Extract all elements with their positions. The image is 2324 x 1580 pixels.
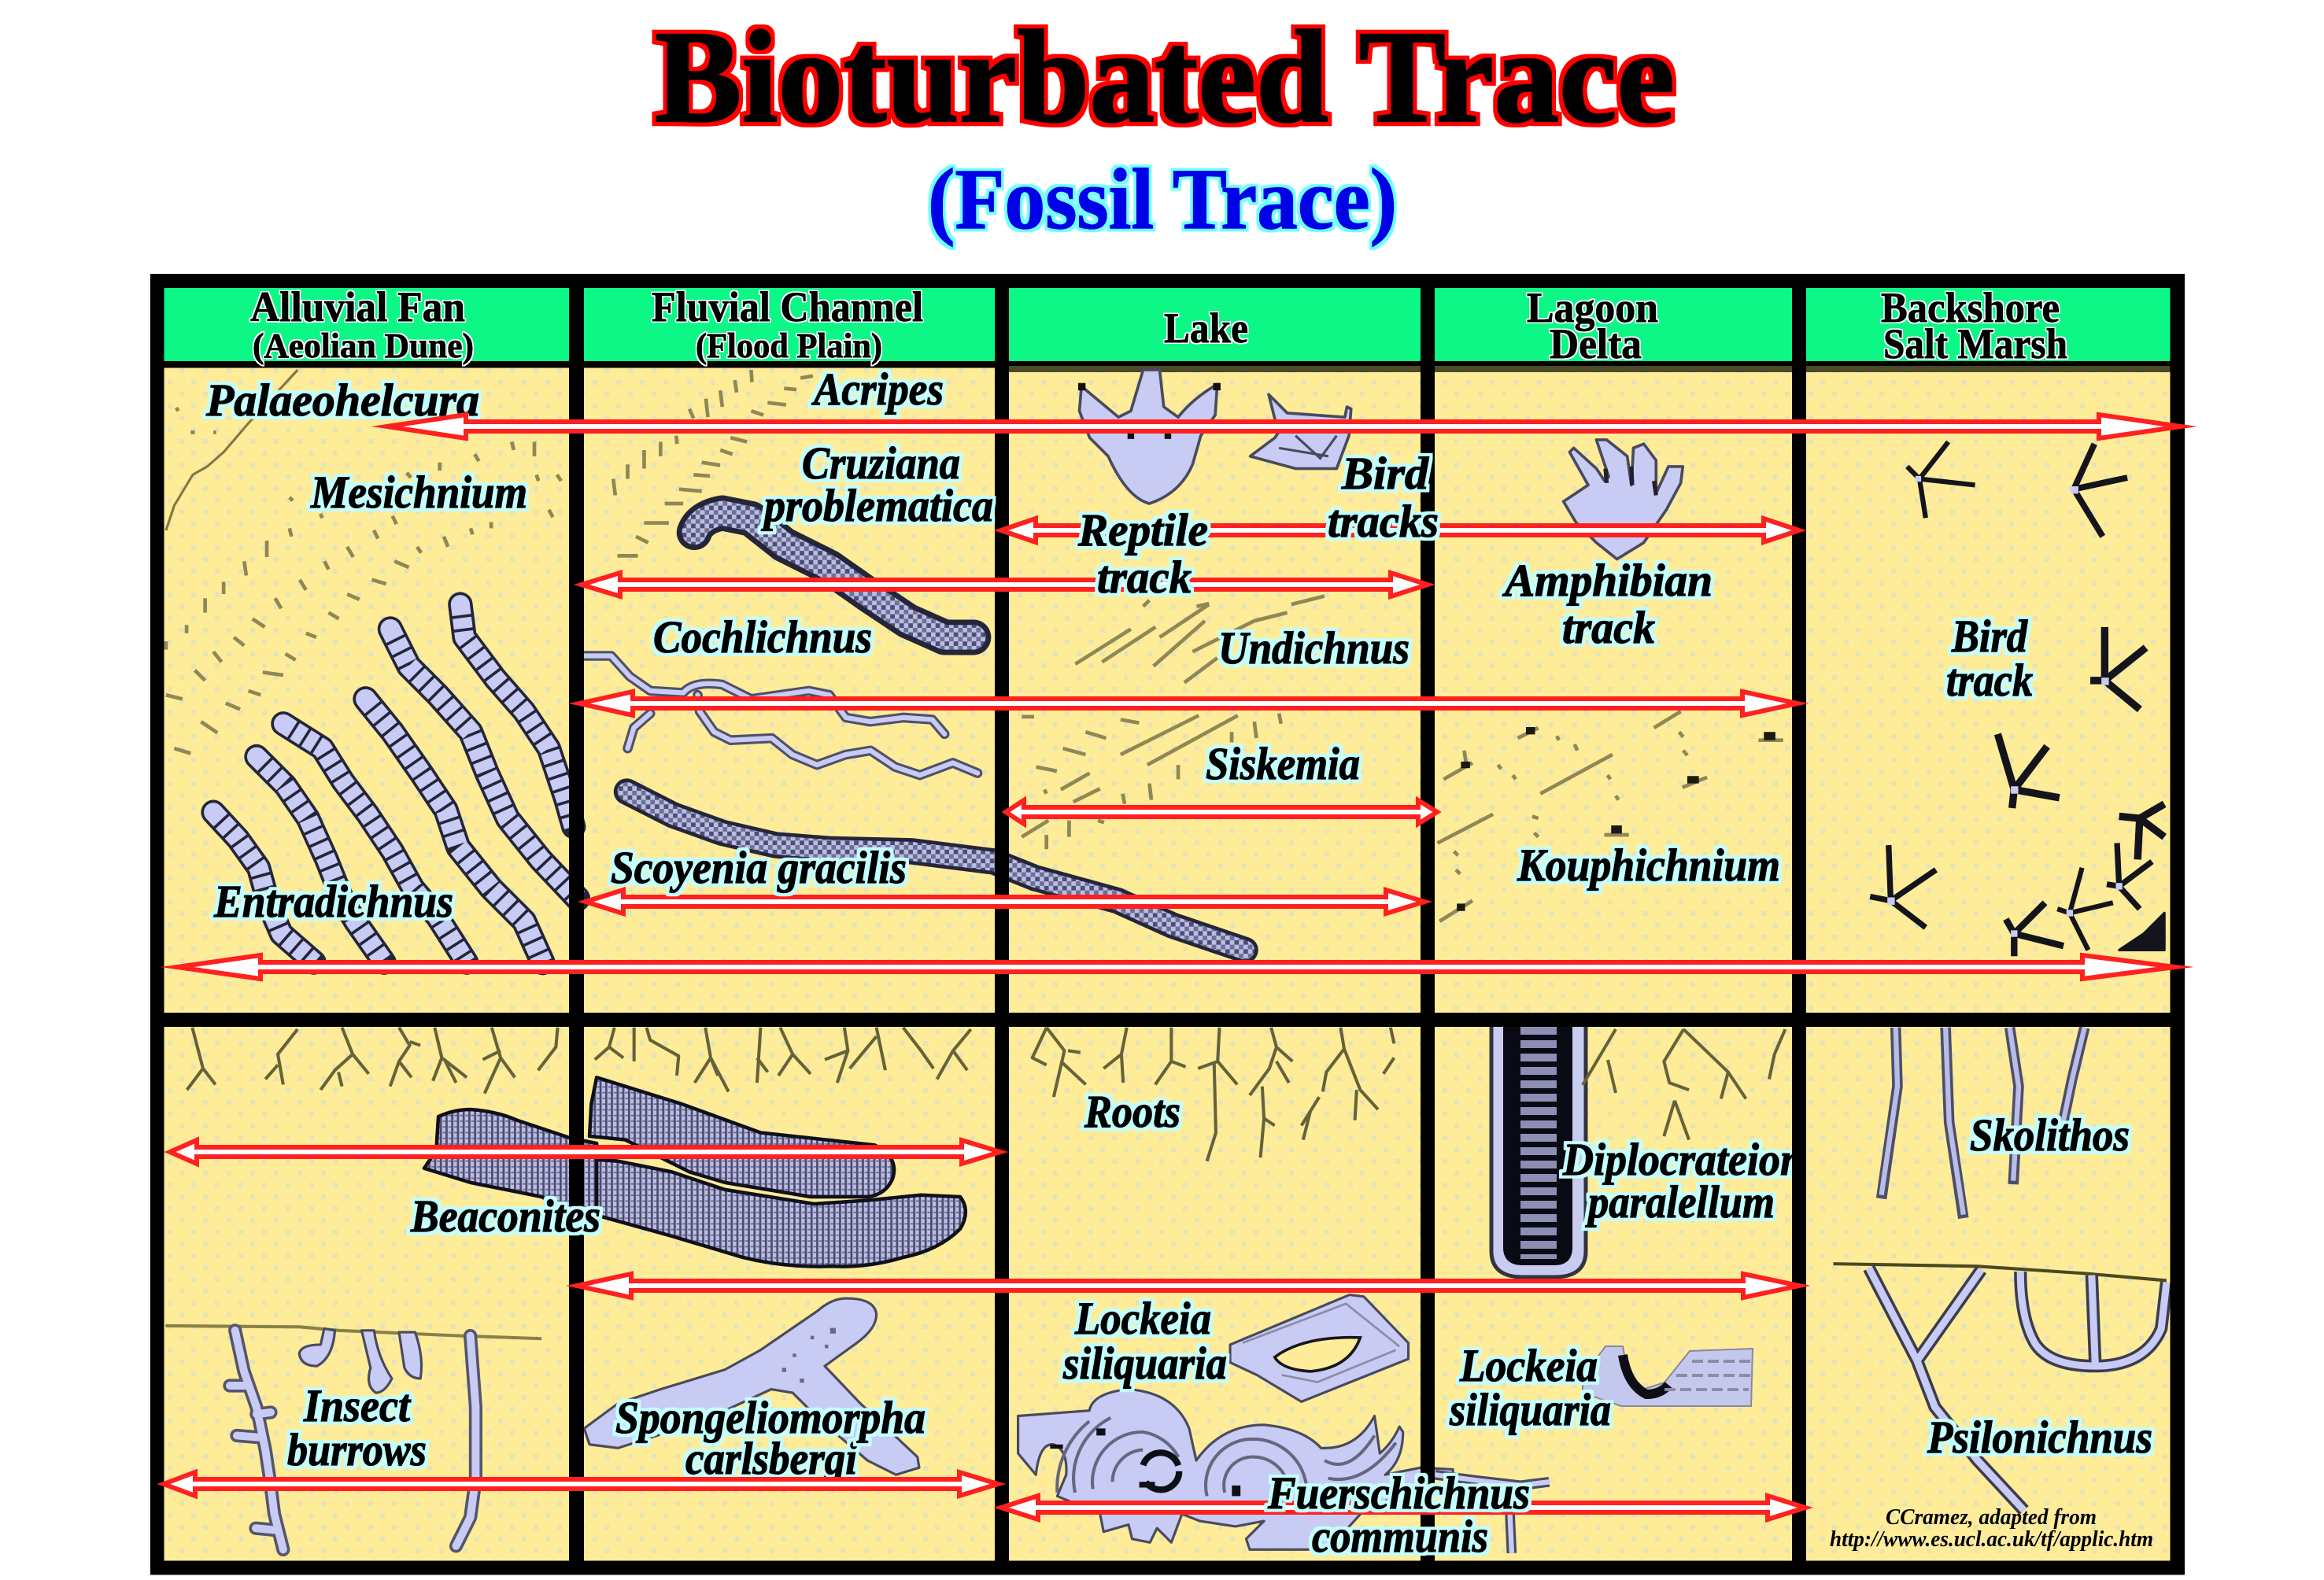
column headers [250, 283, 2067, 367]
icon: footprint centres [1887, 476, 2123, 937]
trace: Acripes marks [613, 370, 813, 556]
trace: burrow drops [299, 1329, 421, 1393]
label: siliquaria, lagoon: siliquaria [1449, 1384, 1611, 1435]
table grid [150, 274, 2185, 1575]
credit: author: CCramez, adapted from [1886, 1505, 2097, 1530]
panel: lagoon delta, lower [1491, 1023, 1785, 1406]
header: Backshore: Backshore [1881, 284, 2060, 331]
label: tracks: tracks [1328, 496, 1439, 547]
header underline strip [1009, 366, 2174, 372]
trace: Fuerschichnus communis [1018, 1390, 1453, 1549]
trace: burrow surface line [165, 1326, 541, 1338]
trace: Fuerschichnus tail [1435, 1475, 1549, 1553]
icon: amphibian finger lines [1605, 467, 1656, 496]
trace: roots [187, 1028, 558, 1094]
panel: backshore salt marsh, upper [1870, 442, 2164, 956]
trace: Lockeia shell hole [1275, 1338, 1360, 1371]
label: Cochlichnus: Cochlichnus [653, 611, 872, 663]
panel: lake, lower [1018, 1028, 1549, 1553]
arrow: Alluvial Fan to Fluvial Channel, burrows [164, 1472, 998, 1496]
trace: roots [1033, 1028, 1394, 1161]
trace: roots [1583, 1029, 1616, 1093]
header: Salt Marsh: Salt Marsh [1883, 320, 2067, 367]
credit: source url: http://www.es.ucl.ac.uk/tf/applic.htm [1830, 1527, 2153, 1552]
panel: alluvial fan, upper [166, 370, 578, 962]
arrow: Fluvial Channel to Lagoon, Cochlichnus [579, 692, 1797, 715]
trace: Fuerschichnus arcs [1057, 1418, 1396, 1496]
trace: Beaconites [424, 1077, 966, 1267]
trace: roots right [1664, 1029, 1785, 1140]
panel: alluvial fan, lower [165, 1028, 558, 1549]
arrow: full width, row one bottom [177, 955, 2175, 979]
label: Roots: Roots [1084, 1086, 1180, 1137]
label: Fuerschichnus: Fuerschichnus [1267, 1467, 1530, 1519]
label: Lockeia, lake: Lockeia [1074, 1293, 1211, 1344]
trace: Lockeia siliquaria shell [1230, 1295, 1409, 1401]
trace: Skolithos [1882, 1028, 2085, 1218]
panel: lagoon delta, upper [1438, 440, 1783, 921]
trace: Fuerschichnus dark patches [1050, 1428, 1240, 1496]
header band background [157, 283, 2176, 366]
label: Skolithos: Skolithos [1970, 1109, 2130, 1161]
header: Lake: Lake [1164, 305, 1248, 352]
trace: Lockeia inner lines [1243, 1304, 1399, 1382]
label: Palaeohelcura: Palaeohelcura [205, 375, 479, 426]
label: Beaconites: Beaconites [410, 1191, 600, 1242]
label: Diplocrateion: Diplocrateion [1562, 1134, 1804, 1185]
label: Bird: Bird [1341, 448, 1429, 499]
trace: Fuerschichnus tail fill [1435, 1475, 1549, 1553]
label: siliquaria, lake: siliquaria [1062, 1338, 1227, 1389]
trace: Siskemia marks [1022, 714, 1281, 849]
panel: fluvial channel, upper [585, 370, 1245, 950]
label: paralellum: paralellum [1584, 1176, 1775, 1227]
label: track, backshore: track [1946, 655, 2033, 706]
label: burrows: burrows [287, 1424, 427, 1475]
icon: bird track inner lines [1279, 436, 1336, 458]
arrow: Lake, Siskemia [1006, 800, 1437, 824]
trace: Palaeohelcura track line [166, 370, 297, 530]
arrow: Lake to Lagoon, Fuerschichnus [1001, 1496, 1805, 1519]
panel: lake, upper [1022, 370, 1351, 849]
credit text [1830, 1505, 2153, 1552]
icon: bird footprints [1870, 442, 2164, 956]
icon: reptile track toe dots [1078, 383, 1221, 439]
label: Reptile: Reptile [1077, 504, 1208, 556]
trace: Entradichnus burrows [204, 595, 578, 962]
header: Fluvial Channel: Fluvial Channel [652, 283, 923, 330]
trace: Cochlichnus [585, 655, 977, 775]
panel: backshore salt marsh, lower [1833, 1028, 2167, 1511]
trace: Diplocrateion tube [1491, 1023, 1586, 1277]
label: Psilonichnus: Psilonichnus [1927, 1412, 2152, 1463]
trace: Fuerschichnus dark swirl [1142, 1453, 1179, 1490]
label: Insect: Insect [303, 1380, 412, 1431]
title: Bioturbated Trace [655, 4, 1675, 150]
trace: insect burrows [230, 1331, 475, 1549]
panel: fluvial channel, lower [424, 1028, 971, 1475]
label: Entradichnus: Entradichnus [213, 876, 453, 927]
trace: Psilonichnus surface line [1833, 1264, 2167, 1280]
label: Scoyenia gracilis: Scoyenia gracilis [611, 842, 907, 893]
icon: amphibian track [1564, 440, 1683, 559]
label: Undichnus: Undichnus [1218, 622, 1410, 674]
label: Bird, backshore: Bird [1951, 611, 2028, 662]
trace: Lockeia siliquaria block [1583, 1346, 1753, 1406]
arrow: Lake to Lagoon, reptile [1001, 519, 1799, 542]
arrow: Fluvial Channel to Lagoon, lower [577, 1274, 1799, 1298]
label: Cruziana: Cruziana [802, 437, 960, 489]
label: Amphibian: Amphibian [1502, 555, 1713, 606]
trace: roots [595, 1028, 971, 1091]
arrow: Alluvial Fan to Backshore, top [387, 415, 2181, 438]
label: Siskemia: Siskemia [1206, 738, 1360, 789]
trace: Mesichnium marks [166, 408, 561, 753]
arrow: Alluvial Fan to Fluvial Channel, Beaconites [170, 1140, 1000, 1164]
header: Lagoon: Lagoon [1527, 284, 1658, 331]
label: track, reptile: track [1097, 552, 1192, 603]
label: Kouphichnium: Kouphichnium [1517, 840, 1780, 891]
header: Flood Plain: (Flood Plain) [696, 327, 882, 365]
trace: Scoyenia gracilis [626, 792, 1245, 950]
header: Alluvial Fan: Alluvial Fan [250, 283, 465, 330]
label: communis: communis [1312, 1511, 1488, 1562]
label: Acripes: Acripes [811, 364, 944, 415]
trace: Spongeliomorpha speckles [782, 1328, 836, 1382]
trace: Psilonichnus burrows [1869, 1268, 2167, 1511]
icon: bird track [1251, 394, 1351, 469]
label: carlsbergi: carlsbergi [685, 1433, 857, 1484]
trace: Undichnus marks [1075, 596, 1325, 682]
header: Aeolian Dune: (Aeolian Dune) [253, 327, 474, 365]
label: problematica: problematica [760, 480, 993, 531]
arrow: Fluvial Channel to Lake, Cruziana [582, 573, 1428, 596]
label: Mesichnium: Mesichnium [310, 467, 527, 518]
label: Lockeia, lagoon: Lockeia [1459, 1340, 1598, 1391]
trace: Lockeia burrow curve [1623, 1355, 1668, 1394]
arrow: Fluvial Channel to Lake, Scoyenia [586, 890, 1424, 914]
icon: reptile track [1080, 370, 1217, 504]
subtitle: (Fossil Trace) [928, 151, 1397, 247]
trace: Kouphichnium marks [1438, 711, 1783, 921]
trace: Lockeia strata lines [1664, 1361, 1751, 1390]
table cell background [157, 366, 2176, 1566]
trace: Cruziana problematica [694, 513, 974, 637]
label: track, amphibian: track [1562, 602, 1655, 653]
trace: Kouphichnium footprints [1457, 727, 1775, 911]
label: Spongeliomorpha: Spongeliomorpha [615, 1392, 926, 1443]
trace: Spongeliomorpha carlsbergi [584, 1298, 919, 1475]
header: Delta: Delta [1550, 320, 1642, 367]
